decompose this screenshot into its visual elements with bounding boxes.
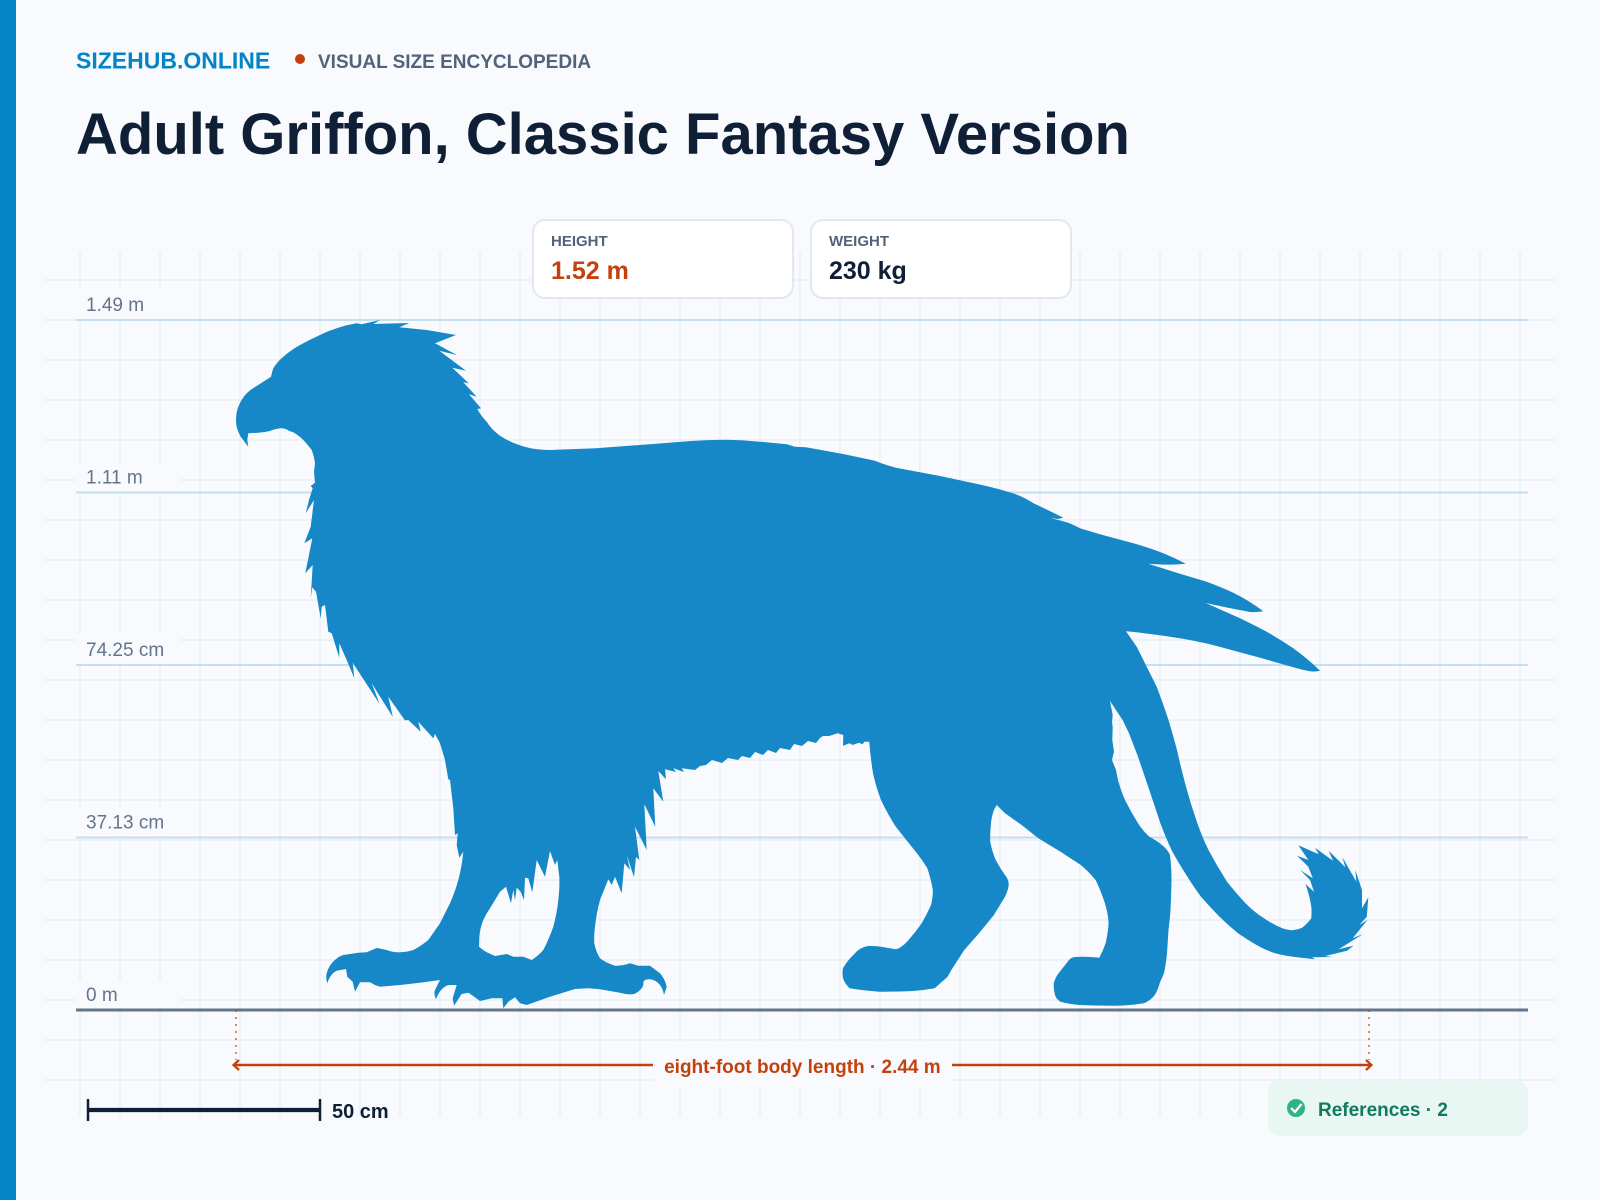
icon: check [1287,1099,1305,1117]
accent bar [0,0,16,1200]
tick label: 1.11 m: 1.11 m [86,468,143,488]
title: Adult Griffon, Classic Fantasy Version [76,102,1130,167]
tick label: 74.25 cm [76,635,180,664]
weight card: WEIGHT [829,233,889,250]
tick label: 37.13 cm: 37.13 cm [86,812,164,834]
tick label: 0 m [76,980,180,1009]
tick label: 1.11 m [76,462,180,491]
scale bar [88,1099,389,1123]
site brand: SIZEHUB.ONLINE [76,48,270,74]
weight card [811,220,1071,298]
tick label: 0 m: 0 m [86,985,118,1006]
height card [533,220,793,298]
body length dimension: eight-foot body length · 2.44 m [664,1057,941,1078]
scale bar: 50 cm [332,1101,389,1123]
height card: HEIGHT [551,233,608,250]
ground line [76,1008,1528,1012]
height card: 1.52 m [551,257,629,285]
tick label: 37.13 cm [76,807,180,836]
body length dimension [234,1010,1372,1087]
tick label: 1.49 m [76,290,180,319]
brand separator dot [295,54,305,64]
weight card: 230 kg [829,257,907,285]
references badge: References · 2 [1318,1100,1448,1121]
references badge [1268,1080,1528,1136]
griffon silhouette [236,320,1368,1008]
tick label: 74.25 cm: 74.25 cm [86,640,164,661]
tick label: 1.49 m: 1.49 m [86,295,144,316]
site tagline: VISUAL SIZE ENCYCLOPEDIA [318,52,591,73]
